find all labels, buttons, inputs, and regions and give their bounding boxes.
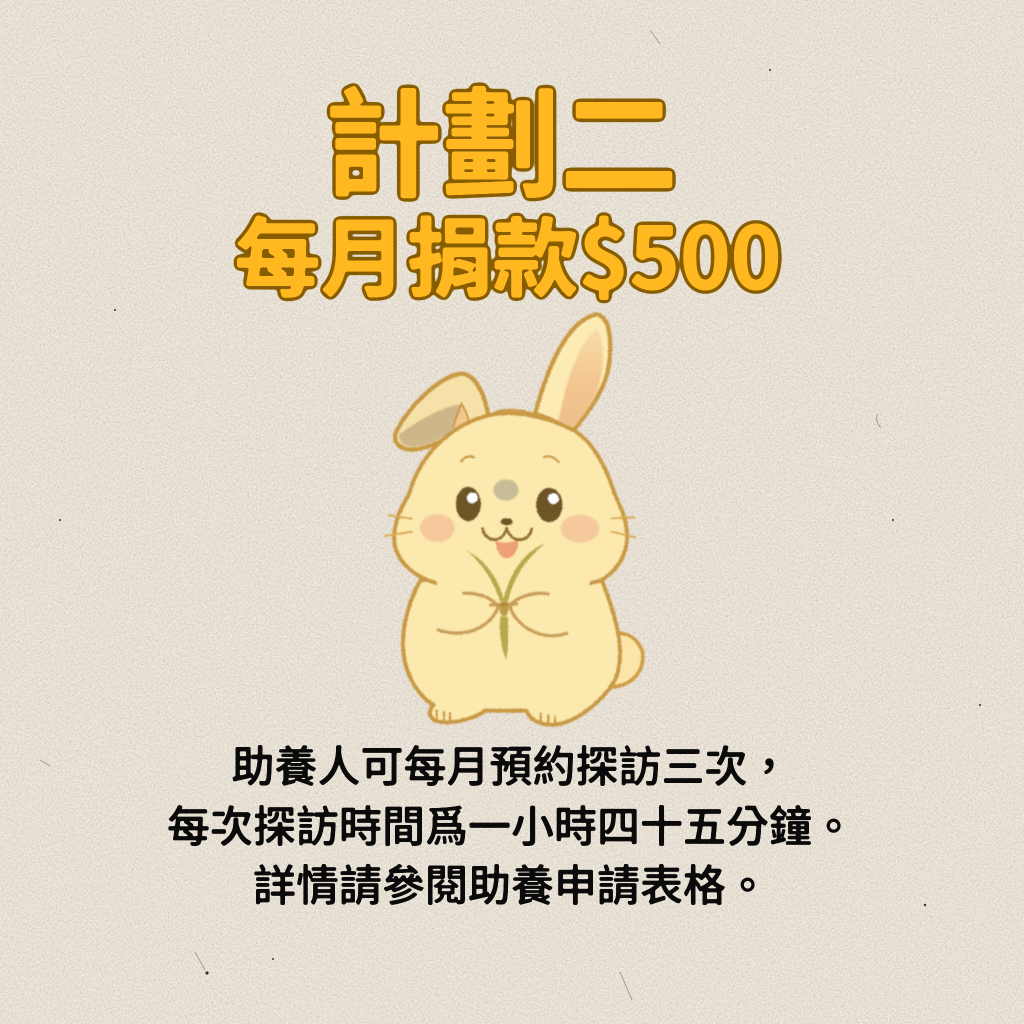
- head and body join: [435, 572, 592, 598]
- rabbit mouth and nose: [483, 518, 532, 558]
- rabbit left ear: [395, 374, 488, 450]
- rabbit tail: [612, 633, 643, 687]
- rabbit eyes: [456, 487, 563, 522]
- illustration: rabbit holding grass: [385, 314, 643, 725]
- title: 計劃二: 計劃二: [324, 50, 678, 221]
- rabbit whiskers: [385, 515, 635, 537]
- rabbit toes: [437, 711, 555, 723]
- rabbit head: [394, 413, 627, 590]
- grass stem at paws: [499, 600, 509, 616]
- rabbit body: [403, 580, 620, 725]
- rabbit forehead tuft: [490, 410, 535, 415]
- subtitle: monthly donation $500: 每月捐款$500: [235, 189, 781, 314]
- rabbit brows and forehead mark: [461, 456, 558, 501]
- rabbit cheeks: [420, 514, 599, 543]
- line 2: 每次探訪時間爲一小時四十五分鐘。: [167, 793, 855, 855]
- line 1: 助養人可每月預約探訪三次，: [232, 733, 790, 795]
- rabbit paws: [438, 593, 567, 636]
- body text: [167, 733, 855, 914]
- grass blades: [467, 543, 545, 659]
- rabbit right ear: [535, 314, 610, 431]
- line 3: 詳情請參閱助養申請表格。: [253, 852, 769, 914]
